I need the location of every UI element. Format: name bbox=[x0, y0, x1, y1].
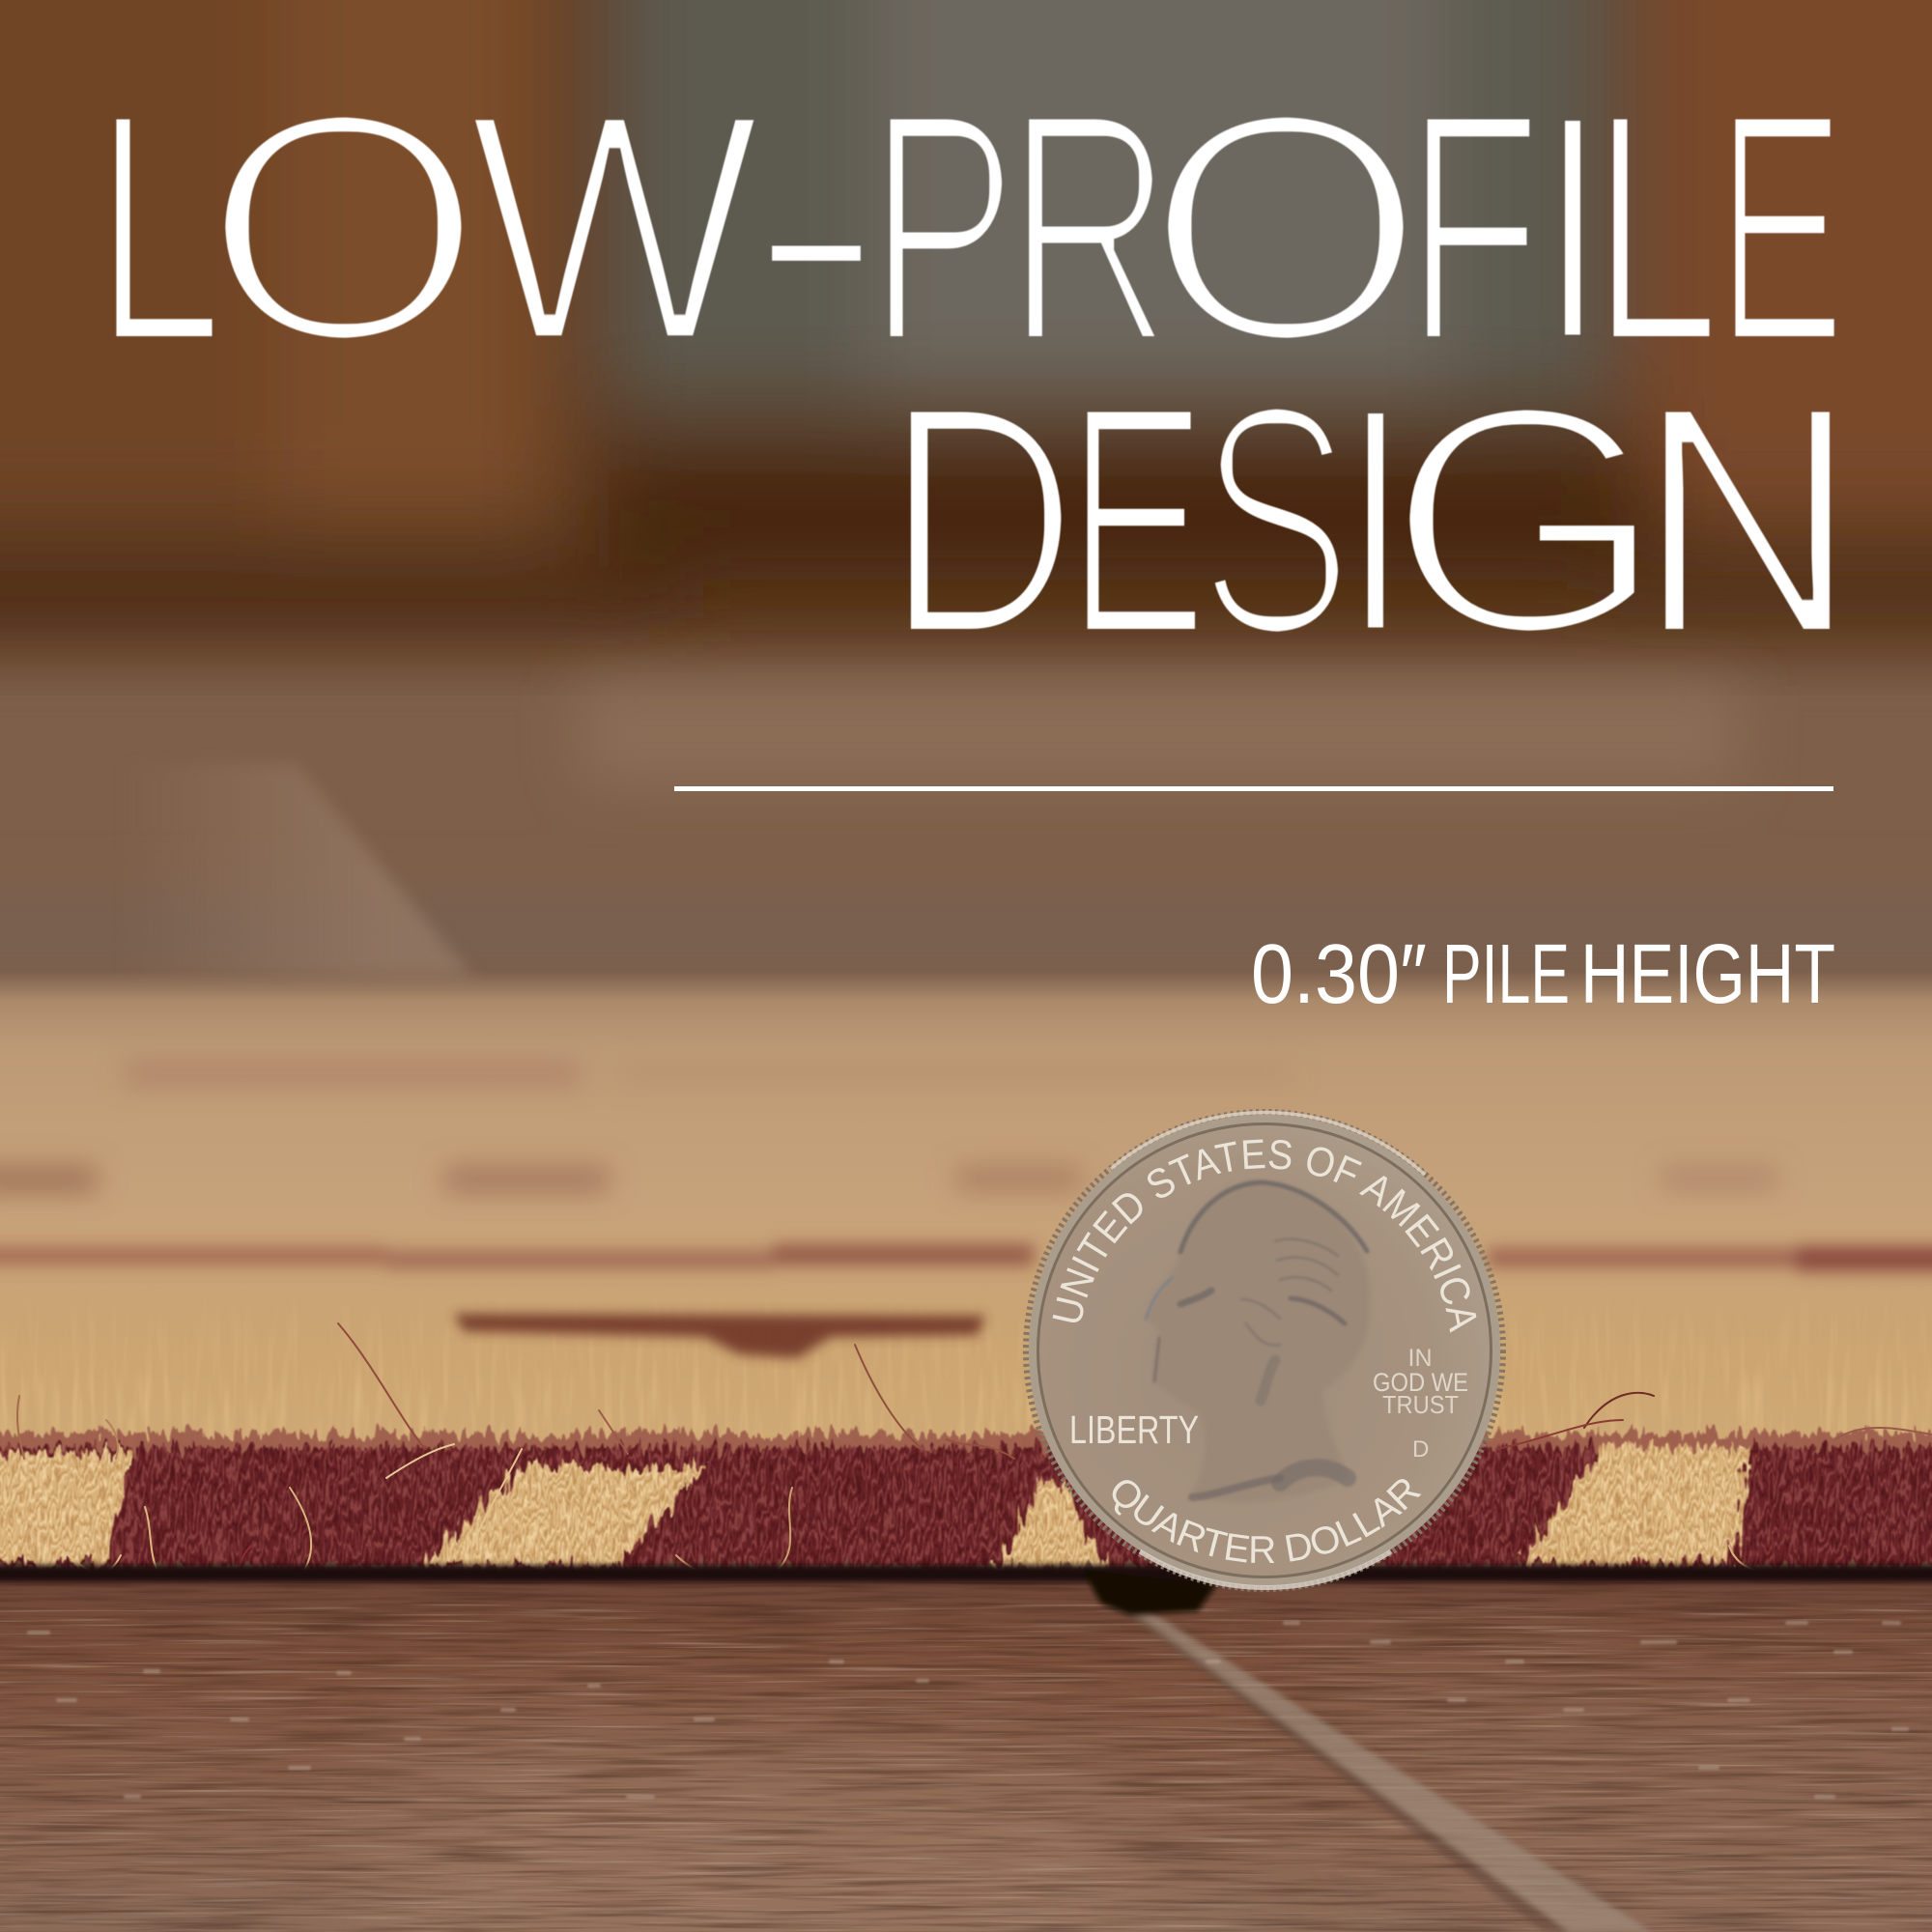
title: F bbox=[1405, 44, 1543, 410]
rug surface bbox=[0, 971, 1932, 1463]
subtitle: pile height: HEIGHT bbox=[1580, 927, 1835, 1021]
title: W bbox=[467, 44, 765, 410]
light diagonal band bbox=[116, 763, 473, 978]
title: E bbox=[1065, 337, 1208, 702]
background: blurred far floor bbox=[0, 657, 1932, 1043]
rug fibres bbox=[17, 1323, 1932, 1586]
title: D bbox=[885, 337, 1078, 702]
wooden floor foreground bbox=[0, 1565, 1932, 1932]
coin portrait bbox=[1146, 1180, 1371, 1502]
coin inscriptions: D bbox=[1412, 1436, 1429, 1463]
divider rule bbox=[674, 786, 1833, 791]
title: L bbox=[93, 44, 224, 410]
title: I bbox=[1534, 44, 1611, 410]
coin inscriptions: TRUST bbox=[1382, 1390, 1459, 1419]
subtitle: pile height: PILE bbox=[1442, 927, 1570, 1021]
rug contact shadow bbox=[0, 1565, 1932, 1615]
title: O bbox=[1146, 44, 1426, 410]
coin inscriptions: QUARTER DOLLAR bbox=[1113, 1479, 1422, 1563]
title: R bbox=[1006, 44, 1174, 410]
title: O bbox=[203, 44, 484, 410]
title: S bbox=[1198, 337, 1353, 702]
subtitle: pile height: 0.30″ bbox=[1251, 927, 1427, 1021]
coin inscriptions: GOD WE bbox=[1373, 1368, 1468, 1397]
coin inscriptions: UNITED STATES OF AMERICA bbox=[1053, 1140, 1476, 1333]
title bbox=[93, 44, 1859, 702]
coin inscriptions bbox=[1053, 1140, 1476, 1563]
rug braided edge bbox=[0, 1434, 1932, 1569]
title: P bbox=[867, 44, 1018, 410]
title: N bbox=[1636, 337, 1859, 702]
title: G bbox=[1386, 337, 1666, 702]
background: blurred room wall bbox=[0, 0, 1932, 696]
title: - bbox=[749, 44, 884, 410]
title: E bbox=[1715, 44, 1847, 410]
title: L bbox=[1590, 44, 1721, 410]
floor specks bbox=[29, 1623, 1907, 1797]
coin inscriptions: LIBERTY bbox=[1069, 1407, 1199, 1452]
title: I bbox=[1337, 337, 1414, 702]
icon: US quarter coin bbox=[1023, 1109, 1506, 1592]
floor seam bbox=[1109, 1600, 1652, 1932]
coin inscriptions: IN bbox=[1408, 1345, 1432, 1372]
